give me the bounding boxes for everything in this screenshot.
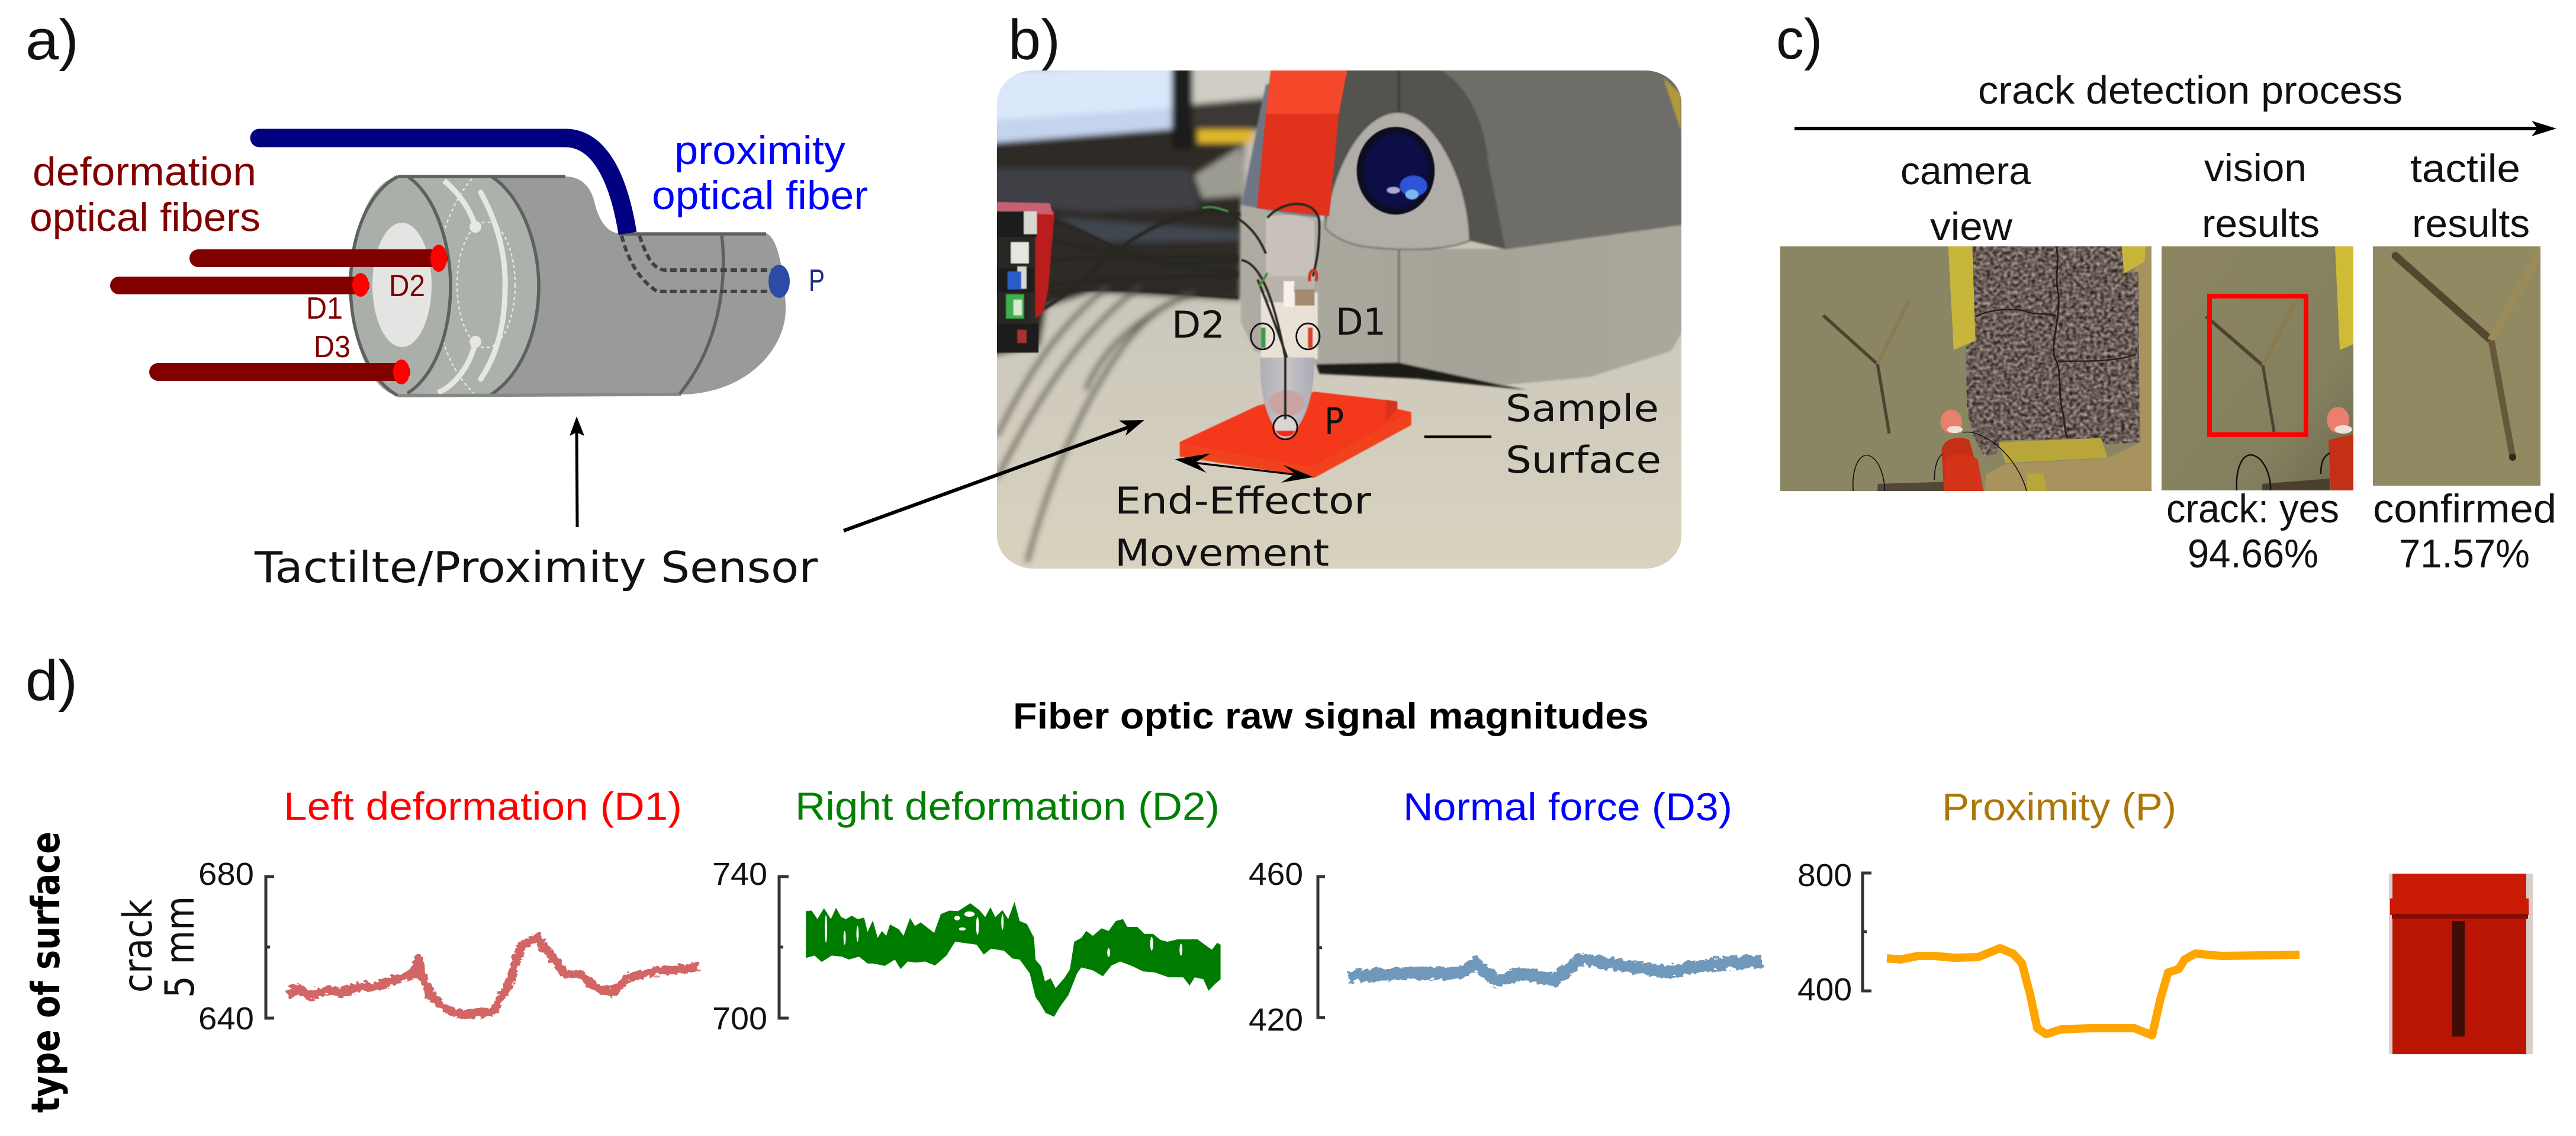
orange arm [1257, 65, 1347, 216]
label: tactile proximity sensor: Tactilte/Proximity Sensor [254, 543, 818, 592]
photo: tactile results [2373, 246, 2543, 486]
icon: deformation fiber D1 [119, 273, 369, 297]
detection box [2210, 296, 2306, 435]
icon: proximity optical fiber [250, 129, 628, 233]
vision result [2166, 486, 2339, 576]
inner face highlight [372, 223, 432, 347]
column labels: tactile [2410, 146, 2520, 190]
y ticks: 420 [1249, 1002, 1303, 1038]
chart: left deformation D1 [198, 784, 697, 1036]
y axis [1318, 877, 1325, 1018]
colored marks in the tube [1261, 270, 1317, 348]
chart section title: Fiber optic raw signal magnitudes [1013, 696, 1649, 737]
process title: crack detection process [1978, 68, 2403, 112]
chart: proximity P [1797, 785, 2300, 1035]
y ticks [1249, 856, 1303, 1038]
panel d: raw signal magnitudes [23, 649, 2533, 1113]
sample line [1424, 435, 1491, 438]
sensor ring band [407, 177, 539, 395]
row label: crack 5 mm: 5 mm [157, 896, 204, 998]
body outlines [350, 177, 766, 396]
label: D2, D1, D3: D2 [389, 269, 425, 303]
photo: red crack sample [2389, 874, 2533, 1054]
panel c: crack detection process [1776, 8, 2556, 576]
chart title: Left deformation (D1) [284, 784, 682, 828]
camera unit [1241, 65, 1686, 390]
ring internals [434, 179, 515, 393]
cables [1043, 212, 1264, 309]
vision result: crack: yes [2166, 486, 2339, 531]
chart title: Normal force (D3) [1403, 785, 1732, 829]
label: D2, D1, D3 [306, 269, 425, 364]
table top and blurred background [988, 59, 1696, 579]
sensor fibers [1202, 204, 1319, 419]
labels on the photo: Sample [1506, 387, 1659, 430]
heading d): d) [25, 649, 78, 713]
front face of sensor [350, 177, 451, 396]
label: deformation optical fibers: deformation [33, 149, 256, 194]
camera lens [1357, 127, 1435, 214]
heading c): c) [1776, 8, 1822, 71]
labels on the photo: Surface [1506, 438, 1661, 482]
column labels: view [1930, 204, 2012, 248]
y ticks [712, 856, 767, 1036]
left connector block [997, 201, 1055, 353]
row label: crack 5 mm [115, 896, 204, 998]
arrow: sensor label to photo [844, 420, 1144, 531]
arrow: end-effector movement [1175, 453, 1314, 483]
label: proximity optical fiber: optical fiber [652, 173, 868, 218]
column labels: vision [2204, 146, 2307, 190]
labels on the photo: P [1324, 400, 1344, 443]
y ticks: 740 [712, 856, 767, 892]
photo: camera view [1776, 243, 2163, 498]
icon: deformation fiber D3 [158, 360, 410, 384]
y ticks: 640 [198, 1001, 254, 1036]
vision result: 94.66% [2188, 531, 2318, 576]
chart: right deformation D2 [712, 784, 1221, 1036]
chart: normal force D3 [1249, 785, 1761, 1038]
y ticks [198, 856, 254, 1036]
row axis label: type of surface: type of surface [23, 832, 69, 1113]
y axis [1863, 873, 1871, 991]
column labels [1900, 146, 2530, 248]
label: D2, D1, D3: D1 [306, 291, 343, 326]
sensor body [350, 177, 786, 396]
tactile result [2373, 486, 2556, 576]
label: deformation optical fibers: optical fibers [30, 195, 261, 240]
signal trace [285, 936, 697, 1013]
y axis [779, 877, 789, 1018]
label: P: P [809, 264, 825, 298]
signal trace [1348, 957, 1761, 980]
y axis [266, 877, 274, 1018]
tactile result: confirmed [2373, 486, 2556, 531]
icon: deformation fiber D2 [198, 245, 447, 272]
labels on the photo: D1 [1336, 300, 1386, 344]
y ticks: 460 [1249, 856, 1303, 892]
row label: crack 5 mm: crack [115, 898, 162, 993]
callout circles [1251, 323, 1320, 439]
panel b: photo of the setup [988, 8, 1696, 579]
tactile result: 71.57% [2399, 531, 2530, 576]
chart title: Proximity (P) [1942, 785, 2176, 829]
chart title: Right deformation (D2) [795, 784, 1220, 828]
y ticks [1797, 858, 1852, 1007]
label: D2, D1, D3: D3 [314, 330, 350, 364]
y ticks: 800 [1797, 858, 1852, 893]
y ticks: 400 [1797, 972, 1852, 1007]
photo [988, 59, 1696, 579]
icon: proximity sensor tip [768, 265, 790, 298]
sensor tube [1260, 215, 1318, 439]
column labels: results [2412, 201, 2530, 245]
labels on the photo: End-Effector [1115, 479, 1372, 522]
label: deformation optical fibers [30, 149, 261, 240]
table streaks [997, 286, 1196, 562]
labels on the photo: Movement [1115, 531, 1329, 575]
labels on the photo [1115, 300, 1661, 575]
panel a: sensor diagram [25, 8, 868, 592]
labels on the photo: D2 [1172, 303, 1225, 346]
column labels: camera [1900, 149, 2031, 192]
internal proximity fiber, dashed [622, 236, 771, 291]
arrow: up to sensor [570, 416, 584, 527]
orange base plate [1180, 391, 1411, 478]
arrow: process direction [1794, 121, 2556, 136]
y ticks: 700 [712, 1001, 767, 1036]
signal traces [806, 902, 1221, 1017]
y ticks: 680 [198, 856, 254, 892]
heading a): a) [25, 8, 79, 72]
label: proximity optical fiber [652, 128, 868, 218]
label: proximity optical fiber: proximity [674, 128, 845, 173]
photo: vision results [2162, 246, 2353, 490]
column labels: results [2202, 201, 2320, 245]
signal trace [1887, 948, 2300, 1035]
heading b): b) [1008, 8, 1060, 72]
